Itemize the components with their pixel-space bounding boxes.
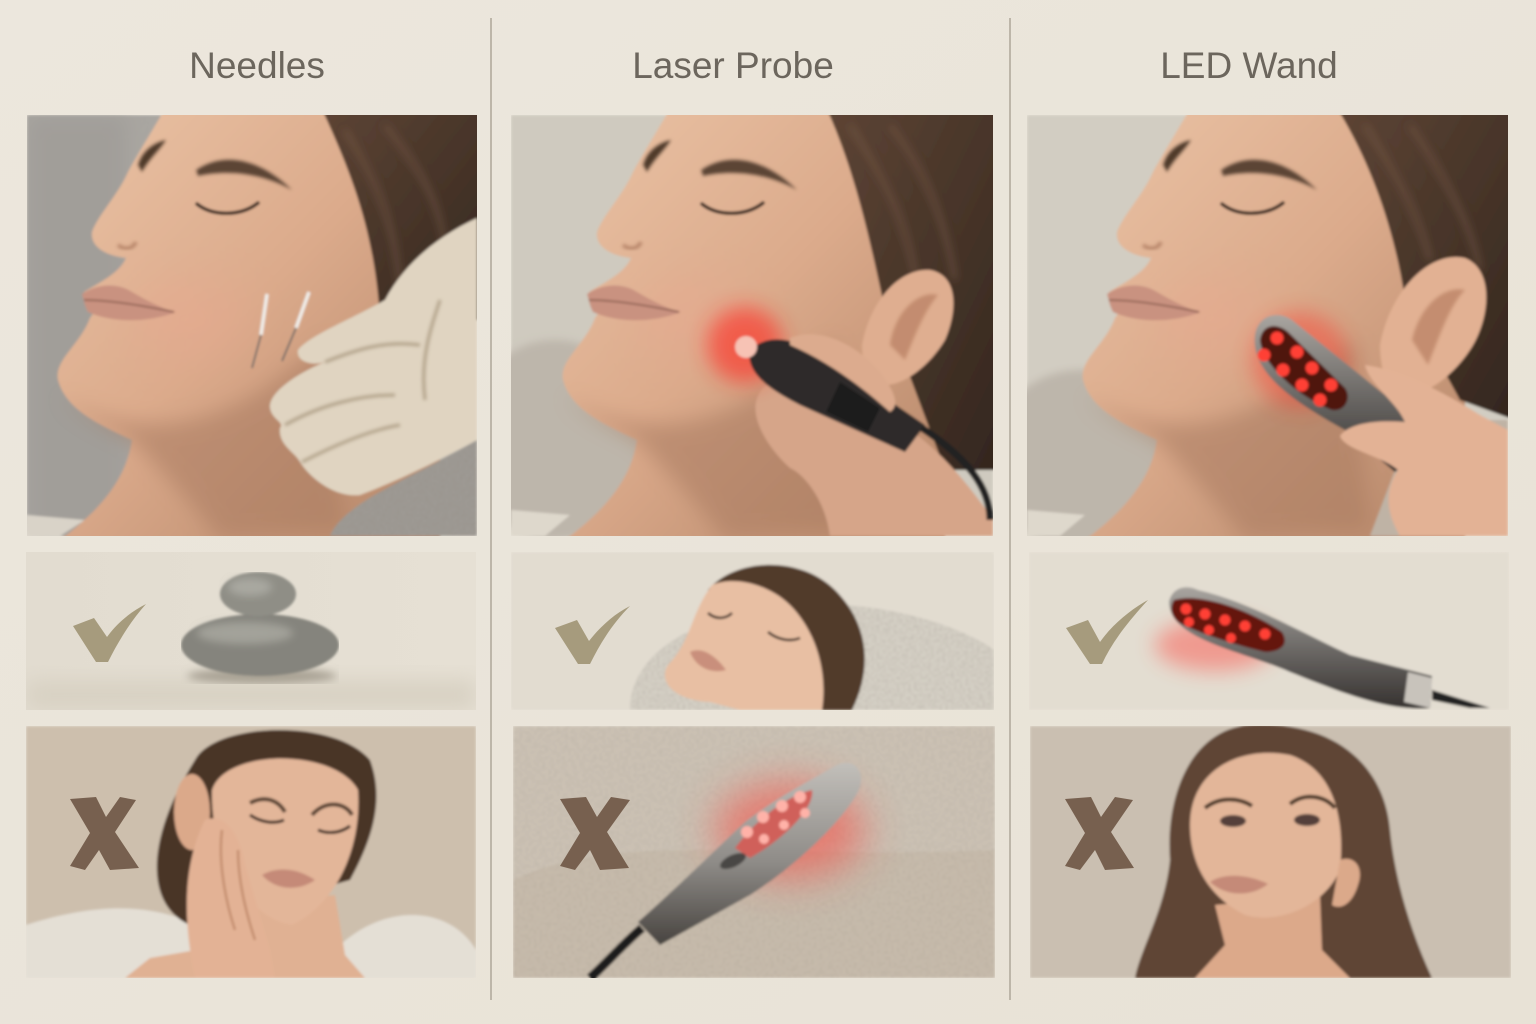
heading: Needles: Needles [189, 45, 325, 86]
hand [1340, 365, 1508, 536]
towel [330, 440, 477, 536]
panel: LED wand treatment photo [1027, 115, 1508, 536]
icon: laser probe [707, 307, 990, 520]
panel: laser probe treatment photo [511, 115, 993, 536]
woman [1135, 725, 1432, 978]
pillow behind hand [1370, 420, 1508, 536]
heading: Laser Probe: Laser Probe [632, 45, 834, 86]
fingers over probe [790, 334, 895, 412]
small reclining face [665, 565, 865, 710]
hand [755, 383, 993, 536]
panel: relaxed face check row [511, 552, 994, 710]
woman [125, 730, 376, 978]
icon: cross [1065, 797, 1134, 870]
gloved hand [270, 218, 477, 495]
hair [825, 105, 1000, 470]
ear [862, 270, 953, 385]
icon: LED wand [1169, 587, 1490, 709]
ear [1380, 257, 1486, 396]
panel: laser wand cross row [513, 726, 995, 978]
panel: needles treatment photo [27, 100, 490, 540]
icon: stacked stones [181, 572, 339, 684]
panel: pained woman cross row [26, 726, 476, 978]
icon: check mark [73, 604, 146, 662]
icon: cross [560, 797, 630, 870]
icon: cross [70, 797, 139, 870]
icon: LED wand [590, 763, 861, 978]
icon: acupuncture needles [252, 292, 309, 368]
panel: doubtful woman cross row [1030, 725, 1511, 978]
hand on cheek [184, 816, 254, 952]
hair [1335, 105, 1515, 420]
icon: check mark [1066, 600, 1148, 664]
panel: stones check row [26, 552, 476, 710]
icon: LED wand [1252, 312, 1430, 472]
heading: LED Wand: LED Wand [1160, 45, 1338, 86]
panel: LED wand check row [1066, 585, 1491, 710]
icon: check mark [555, 606, 630, 664]
hair [323, 115, 477, 321]
